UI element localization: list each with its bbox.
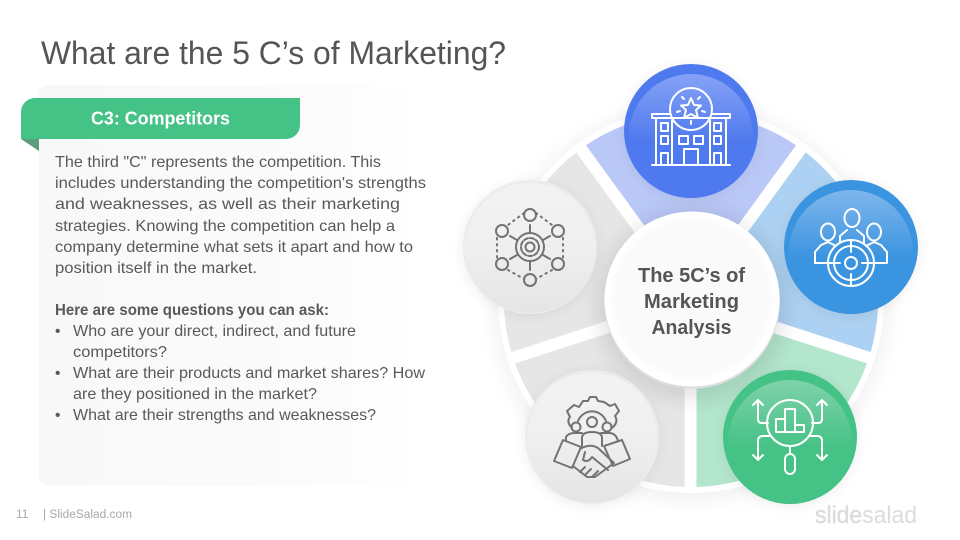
icon: building with star <box>652 88 730 165</box>
node: right blue circle with target audience icon <box>784 180 918 314</box>
wheel: five segments <box>493 105 889 501</box>
segment: bottom right green <box>691 300 869 487</box>
description text: strategies. Knowing the competition can help a <box>55 218 395 235</box>
questions list: Here are some questions you can ask: <box>55 302 329 319</box>
questions list: • <box>55 365 60 382</box>
questions list: are they positioned in the market? <box>73 386 317 403</box>
questions list: • <box>55 323 60 340</box>
description text: company determine what sets it apart and how to <box>55 239 413 256</box>
questions list: What are their products and market shares? How <box>73 365 426 382</box>
node: bottom left gray circle with handshake icon <box>525 370 659 504</box>
description text: includes understanding the competition's strengths <box>55 175 426 192</box>
title: What are the 5 C’s of Marketing? <box>41 35 506 71</box>
icon: gear, people and handshake <box>554 397 630 477</box>
description text: position itself in the market. <box>55 260 257 277</box>
questions list <box>55 302 426 424</box>
description text: and weaknesses, as well as their marketing <box>55 196 400 213</box>
panel: C3 competitors <box>21 85 426 485</box>
segment: top blue <box>581 113 801 300</box>
center label: The 5C’s of <box>638 265 745 287</box>
description text: The third "C" represents the competition. This <box>55 154 381 171</box>
icon: people and target <box>815 209 887 286</box>
segment: right light blue <box>691 149 878 358</box>
icon: magnifier with bars and arrows <box>753 400 827 474</box>
node: left gray circle with network icon <box>463 180 597 314</box>
center label: Analysis <box>652 317 732 339</box>
center label <box>638 265 745 339</box>
footer source: | SlideSalad.com <box>43 509 132 521</box>
segment: bottom left gray <box>513 300 691 487</box>
footer page number: 11 <box>16 507 29 521</box>
logo: slidesalad: slidesalad <box>815 502 917 529</box>
center circle <box>598 211 786 399</box>
questions list: Who are your direct, indirect, and future <box>73 323 356 340</box>
description text <box>55 154 426 277</box>
ribbon heading: C3: Competitors <box>91 108 230 128</box>
segment: left gray <box>504 149 691 358</box>
questions list: competitors? <box>73 344 167 361</box>
center label: Marketing <box>644 291 739 313</box>
node: green circle with analytics icon <box>723 370 857 504</box>
node: top blue circle with building icon <box>624 64 758 198</box>
icon: gear hub network <box>496 209 564 286</box>
questions list: What are their strengths and weaknesses? <box>73 407 376 424</box>
ribbon heading <box>21 98 300 151</box>
questions list: • <box>55 407 60 424</box>
